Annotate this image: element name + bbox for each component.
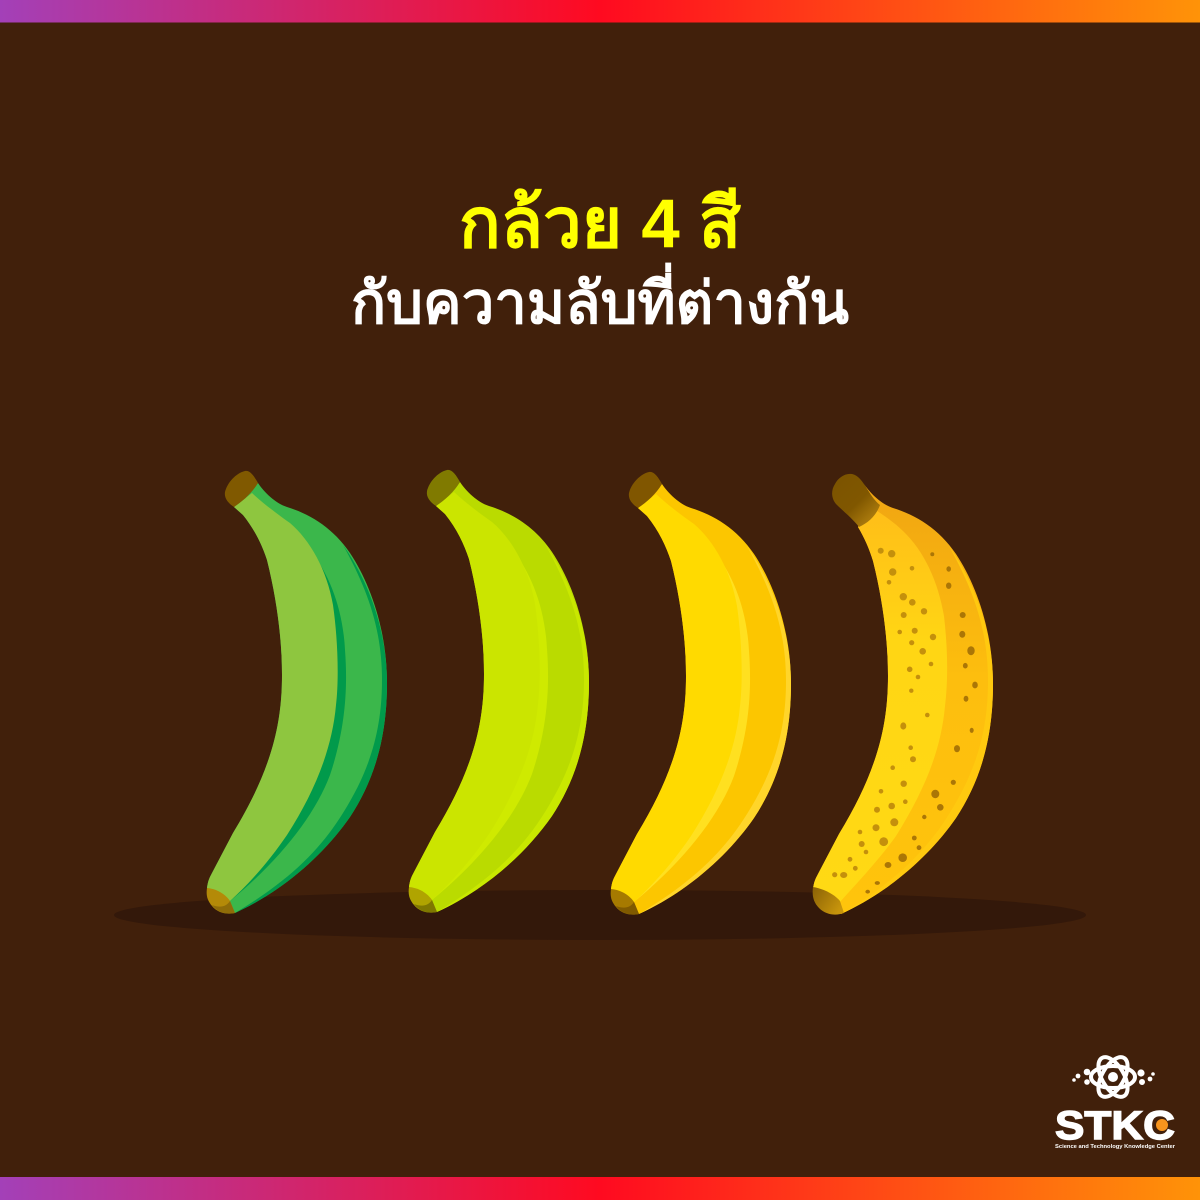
- banana 1: green: [207, 471, 387, 914]
- logo: STKC: [1055, 1052, 1176, 1150]
- title: [351, 185, 849, 336]
- banana 3: yellow: [611, 472, 791, 915]
- ground shadow: [114, 890, 1086, 940]
- wordmark: STKC: [1055, 1104, 1175, 1148]
- banana 2: lime: [409, 470, 589, 913]
- orange dot: [1156, 1119, 1168, 1131]
- heading: white line: กับความลับที่ต่างกัน: [351, 262, 849, 336]
- top gradient bar: [0, 0, 1200, 22]
- banana 4: ripe with spots: [813, 474, 993, 915]
- heading: yellow line: กล้วย 4 สี: [459, 185, 742, 262]
- tagline: Science and Technology Knowledge Center: [1055, 1144, 1176, 1150]
- spots on shaded face: [865, 552, 978, 894]
- spots on light face: [832, 548, 936, 878]
- icon: atom: [1072, 1052, 1155, 1102]
- bottom gradient bar: [0, 1177, 1200, 1200]
